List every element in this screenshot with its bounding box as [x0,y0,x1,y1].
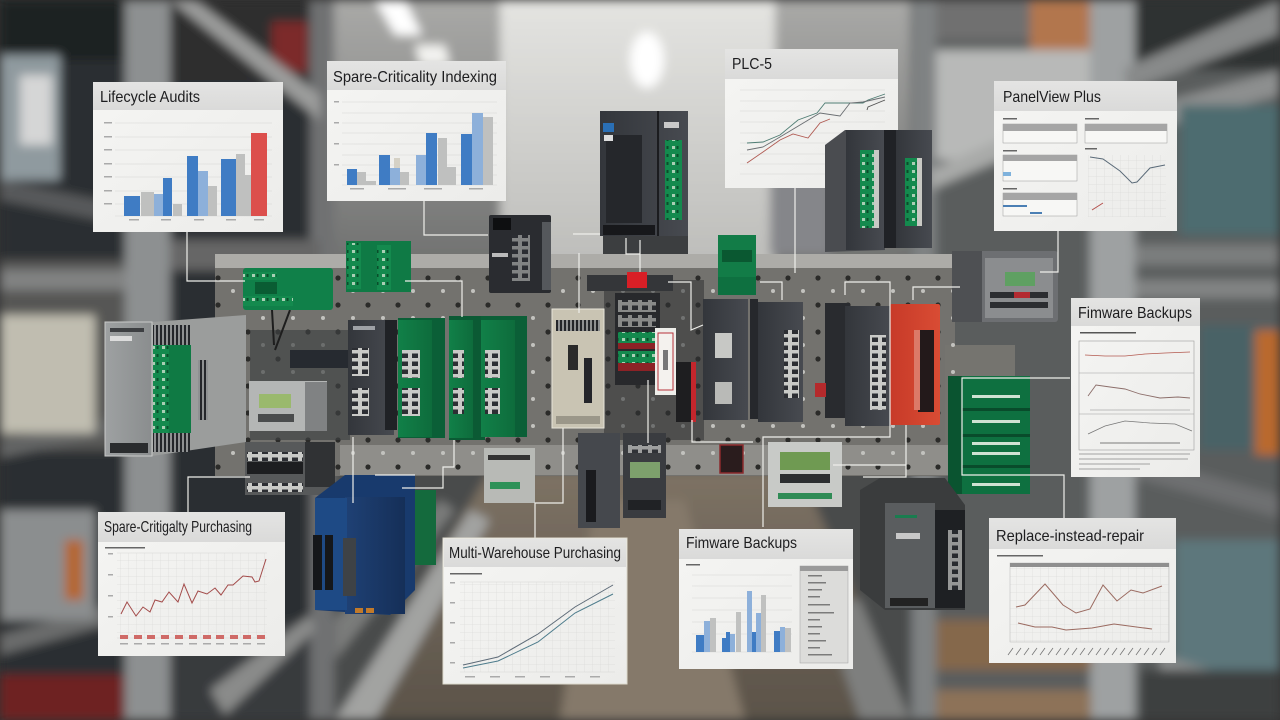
panel: PanelView Plus [994,81,1177,231]
device: green terminal stack [948,376,1030,494]
title: Firmware Backups: Fimware Backups [686,535,797,552]
device: cream controller [552,309,604,428]
device: dark module next to red module [815,303,891,426]
bar chart with side table [686,564,848,663]
status tables and trend chart [1003,118,1167,217]
device: central relay rack with red block [587,272,673,385]
device: green terminal module upper [346,241,411,292]
device: small meter [484,448,535,503]
title: Multi-Warehouse Purchasing: Multi-Warehouse Purchasing [449,545,621,562]
device: small grey display unit [249,381,327,431]
panel: Replace-instead-repair [989,518,1176,663]
connector lines linking panels to devices [187,188,1070,538]
panel: Firmware Backups right [1071,298,1200,477]
device: tall dark modules overlapping PLC-5 panel [825,130,932,252]
device: white display unit [768,442,842,507]
title: Spare-Criticality Indexing: Spare-Criticality Indexing [333,69,497,86]
panel: PLC-5 [725,49,898,188]
device: red frame connector [720,445,743,473]
panel: Spare-Criticality Purchasing [98,512,285,656]
device: green IO module group [398,316,527,440]
panel: Spare-Criticality Indexing [327,61,506,201]
title: Lifecycle Audits: Lifecycle Audits [100,89,200,106]
device: green terminal module left [243,268,333,310]
combo chart: purchasing [105,547,267,644]
panel: Lifecycle Audits [93,82,283,232]
bar chart: lifecycle audits [104,122,272,220]
device: grey HMI keypad [952,251,1058,322]
device: large grey drive with green terminals [105,315,246,456]
device: dark IO module pair [703,299,803,422]
device: green stacked connector [718,235,756,295]
title: Firmware Backups: Fimware Backups [1078,305,1192,322]
device: blue drive unit [313,475,436,615]
device: red IO module [890,304,940,425]
line chart: PLC-5 [740,90,885,174]
title: PanelView Plus: PanelView Plus [1003,89,1101,106]
panel: Firmware Backups bottom [679,529,853,669]
title: Replace-instead-repair: Replace-instead-repair [996,528,1145,545]
device: black controller [489,215,551,293]
line chart: purchasing trend [450,573,615,678]
bar chart: spare criticality [334,101,497,190]
device: white and red label tag [655,328,676,395]
device: dark drive lower right [860,478,965,610]
device: large dark PLC controller [600,111,688,254]
device: dark IO module [348,320,397,435]
title: PLC-5: PLC-5 [732,56,772,73]
line chart: replace versus repair [997,555,1169,655]
title: Spare-Critigalty Purchasing: Spare-Critigalty Purchasing [104,519,252,536]
mounting back plate with perforated rail [215,254,1015,476]
device: terminal block unit [245,442,335,495]
device: red edged terminal [676,362,696,422]
panel: Multi-Warehouse Purchasing [443,538,627,684]
stacked trend charts [1079,332,1194,469]
device: two narrow modules bottom centre [578,433,666,528]
